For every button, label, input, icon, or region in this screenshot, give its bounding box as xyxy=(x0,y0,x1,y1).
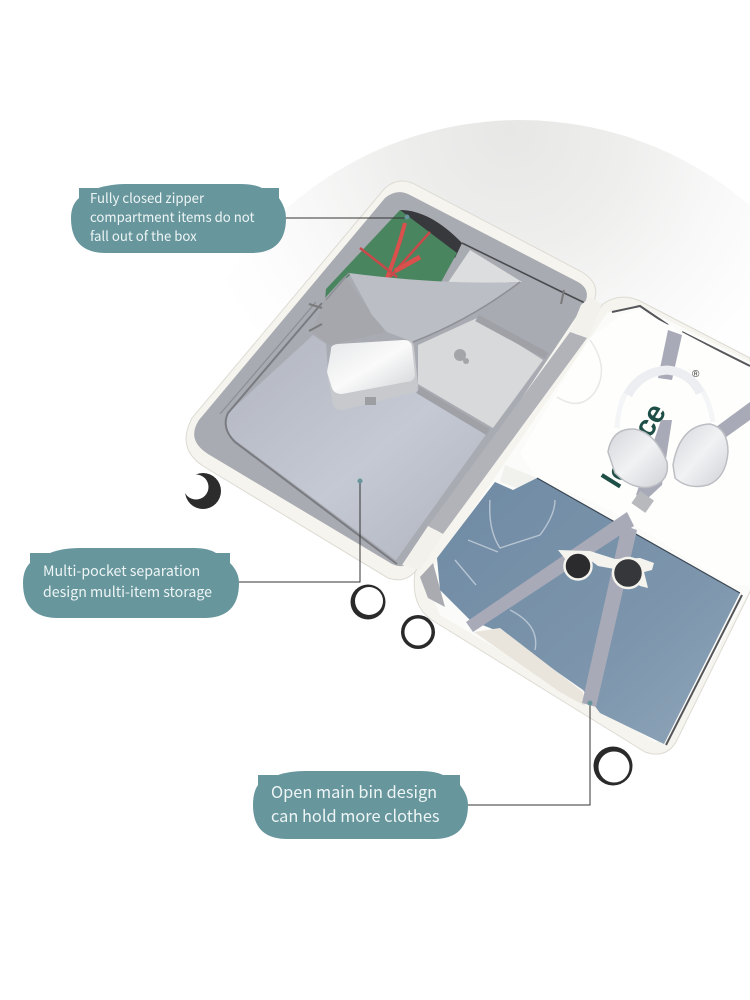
bubble text: can hold more clothes xyxy=(271,803,440,827)
gift box xyxy=(325,210,457,300)
silver box xyxy=(327,340,418,410)
bubble text: design multi-item storage xyxy=(43,582,212,602)
bubble text: fall out of the box xyxy=(90,226,197,245)
zipper flap xyxy=(349,273,520,342)
main zipper xyxy=(226,303,397,564)
headphones xyxy=(608,370,728,487)
callout: main bin xyxy=(253,700,592,839)
center hinge strap xyxy=(402,297,602,570)
bubble xyxy=(253,771,468,839)
callout: zipper compartment xyxy=(71,184,410,253)
lining xyxy=(194,192,587,566)
white t-shirt xyxy=(520,310,750,585)
shirt logo: lodace xyxy=(596,398,673,494)
laptop mesh xyxy=(418,318,543,428)
open suitcase left shell xyxy=(186,181,596,580)
sunglasses xyxy=(558,550,654,588)
lining corner xyxy=(420,563,445,607)
folded item under shirt xyxy=(500,465,537,492)
bubble text: Multi-pocket separation xyxy=(43,561,200,581)
bubble xyxy=(23,548,239,618)
white t-shirt: ® xyxy=(692,369,700,380)
towel xyxy=(447,250,522,284)
dark gap by shirt xyxy=(557,367,577,397)
zipper track right xyxy=(462,243,585,303)
bubble text: compartment items do not xyxy=(90,207,255,226)
background circle xyxy=(168,120,750,824)
luggage straps xyxy=(466,330,750,707)
top dark edge xyxy=(612,306,750,366)
left suitcase wheel xyxy=(184,473,221,509)
upper left pocket area xyxy=(312,276,385,345)
pocket divider bands xyxy=(418,318,547,432)
bubble xyxy=(71,184,286,253)
jeans xyxy=(437,478,742,745)
interior base xyxy=(425,306,750,742)
apple logo mark xyxy=(454,349,469,364)
zipper pulls xyxy=(309,290,564,331)
flap zipper edge xyxy=(326,273,520,342)
bubble text: Fully closed zipper xyxy=(90,188,205,207)
bubble text: Open main bin design xyxy=(271,779,437,803)
right suitcase wheels xyxy=(350,584,632,786)
callout: multi-pocket xyxy=(23,478,362,618)
open suitcase right shell xyxy=(414,297,750,754)
main mesh pocket xyxy=(225,335,487,560)
slot dark xyxy=(400,210,462,258)
